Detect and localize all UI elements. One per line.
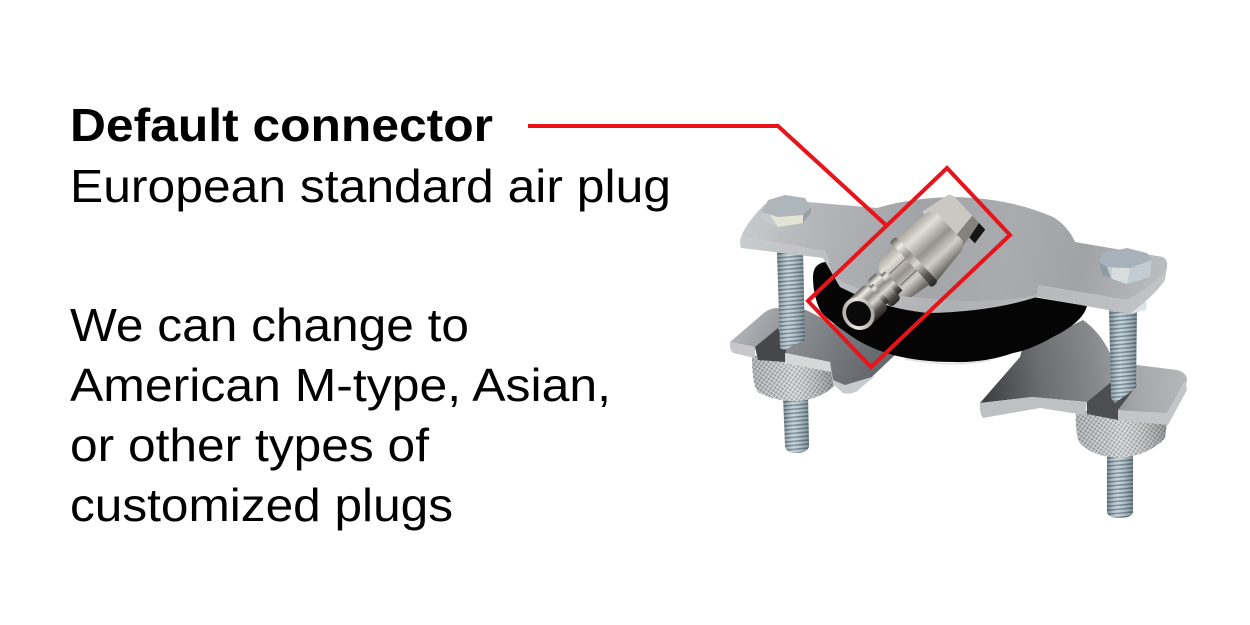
subheading: European standard air plug: European standard air plug <box>70 160 671 212</box>
air plug connector <box>826 189 989 347</box>
text block: customization note <box>70 299 611 531</box>
nose <box>845 283 889 327</box>
right lower bolt end <box>1107 450 1133 518</box>
right knurled knob <box>1076 410 1168 458</box>
left threaded bolt <box>777 250 805 350</box>
left lower plate <box>730 308 895 394</box>
text block: default connector heading and description <box>70 99 671 212</box>
text block: customization note: We can change to <box>70 299 469 351</box>
black rubber seal <box>813 262 1087 362</box>
product illustration: clamp with air plug <box>730 189 1187 518</box>
right lower plate <box>980 320 1187 425</box>
hex section <box>873 246 930 303</box>
top clamp plate <box>740 197 1167 314</box>
square end <box>922 189 982 249</box>
flange <box>889 236 938 288</box>
nose opening <box>836 291 881 337</box>
waist <box>876 271 902 299</box>
text block: customization note: American M-type, Asian, <box>70 359 611 411</box>
text block: customization note: or other types of <box>70 419 429 471</box>
text block: customization note: customized plugs <box>70 479 453 531</box>
heading: Default connector: Default connector <box>70 99 493 151</box>
groove <box>866 284 889 307</box>
right threaded bolt <box>1109 305 1137 403</box>
underside light line of seal <box>905 359 990 364</box>
red leader line <box>528 126 887 226</box>
left hex nut <box>762 195 811 227</box>
left lower bolt end <box>783 395 809 453</box>
main body <box>895 206 971 282</box>
red highlight frame around connector <box>808 168 1010 367</box>
left knurled knob <box>752 355 835 401</box>
right hex nut <box>1099 248 1152 284</box>
right washer under plate <box>1108 302 1147 314</box>
ring <box>867 272 901 308</box>
